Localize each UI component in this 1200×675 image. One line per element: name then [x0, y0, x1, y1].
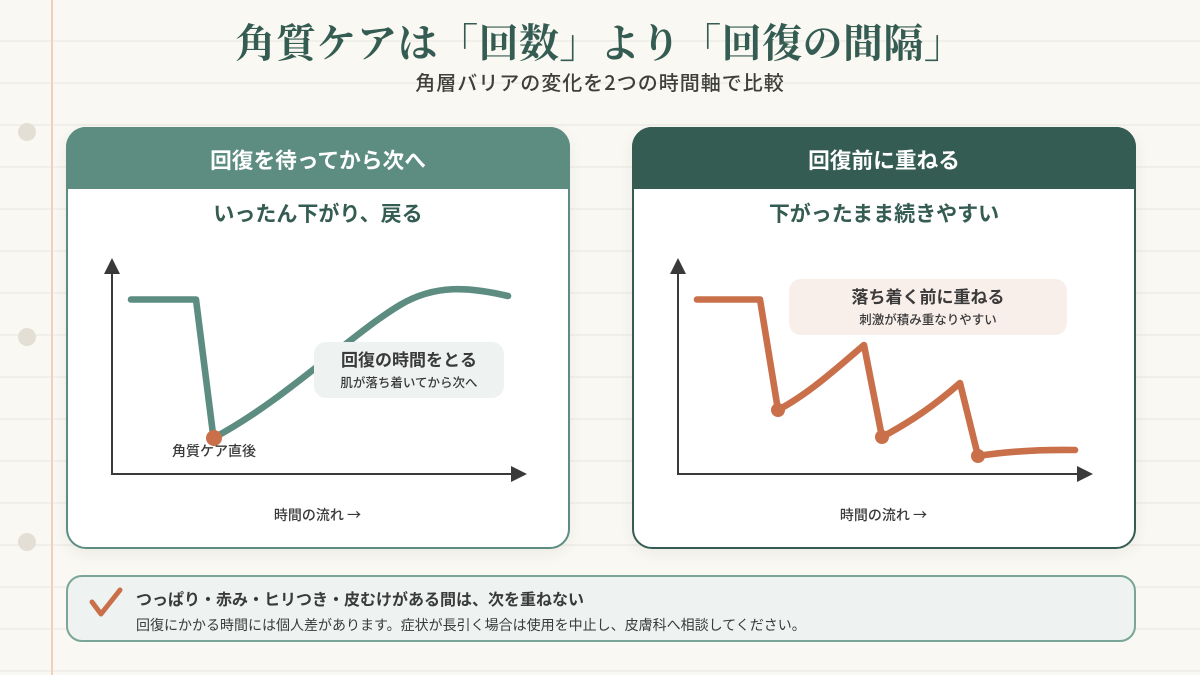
title: 角質ケアは「回数」より「回復の間隔」 — [236, 12, 964, 69]
axis label: time: 時間の流れ → — [840, 505, 927, 525]
axes — [104, 258, 527, 482]
axes — [670, 258, 1093, 482]
callout heading: 落ち着く前に重ねる — [852, 283, 1004, 308]
note text: 回復にかかる時間には個人差があります。症状が長引く場合は使用を中止し、皮膚科へ相談してください。 — [136, 615, 806, 635]
callout: bottom note — [66, 575, 1136, 642]
panel header: recovery first: 回復を待ってから次へ — [210, 144, 426, 175]
callout text: 肌が落ち着いてから次へ — [340, 372, 478, 391]
icon: check mark — [90, 588, 122, 616]
panel: layering before recovery — [632, 127, 1136, 549]
markers: each care — [771, 403, 985, 463]
marker: just after care — [206, 430, 222, 446]
line chart: recovery first — [104, 258, 527, 482]
axis label: time: 時間の流れ → — [274, 505, 361, 525]
callout: take recovery time — [314, 342, 504, 398]
panel header: layering: 回復前に重ねる — [808, 144, 960, 175]
panel header: layering — [632, 127, 1136, 189]
callout: layering before settled — [789, 279, 1067, 335]
subtitle: 角層バリアの変化を2つの時間軸で比較 — [415, 67, 785, 96]
label: just after care: 角質ケア直後 — [172, 441, 256, 461]
panel subheading: layering: 下がったまま続きやすい — [769, 198, 999, 228]
panel subheading: recovery first: いったん下がり、戻る — [213, 198, 423, 228]
note heading: つっぱり・赤み・ヒリつき・皮むけがある間は、次を重ねない — [136, 586, 584, 610]
panel header: recovery first — [66, 127, 570, 189]
curve: dip and recovery — [131, 289, 508, 438]
line chart: layering — [670, 258, 1093, 482]
callout text: 刺激が積み重なりやすい — [859, 309, 997, 328]
curve: repeated dips — [697, 300, 1075, 456]
panel: recovery first — [66, 127, 570, 549]
callout heading: 回復の時間をとる — [341, 346, 477, 371]
